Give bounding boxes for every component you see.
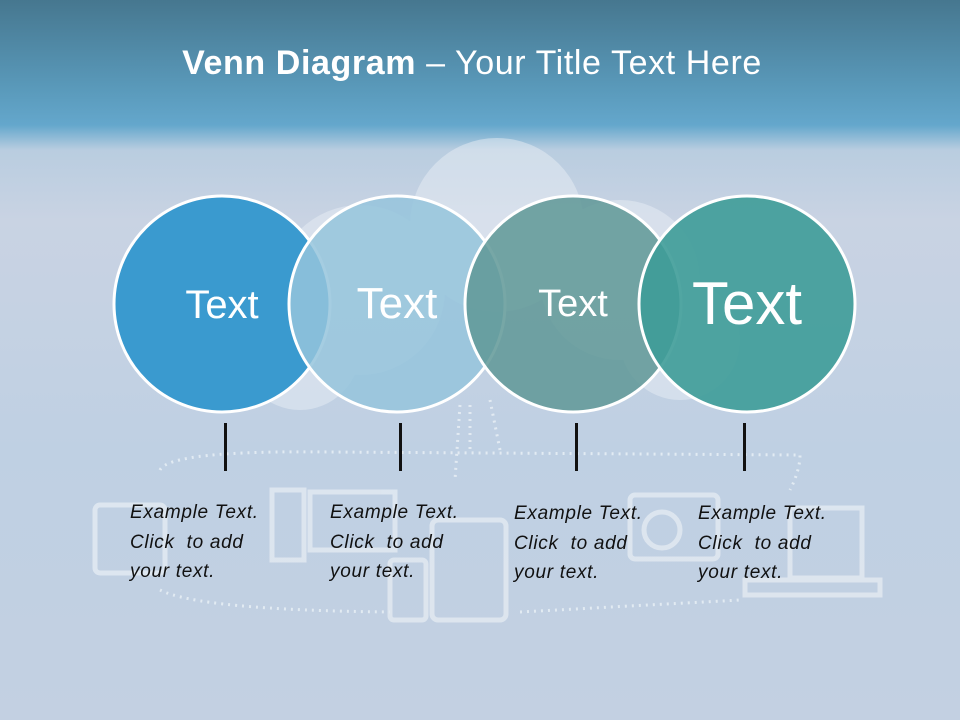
circle 3 [465,196,681,412]
text block 2: Click to add [330,532,444,552]
text block 3: Example Text. [514,503,643,524]
circle 2: Text [357,279,437,328]
circle 2 [289,196,505,412]
text block 2: Example Text. [330,502,459,523]
text block 1: your text. [130,561,215,582]
text block 1: Click to add [130,532,244,552]
text block 4 [696,503,827,583]
text block 1: Example Text. [130,502,259,523]
text block 4: Example Text. [698,503,827,524]
text block 3: your text. [514,562,599,583]
circle 1: Text [185,283,259,327]
circle 3: Text [538,283,608,325]
text block 4: Click to add [698,532,812,554]
title: Venn Diagram – Your Title Text Here [182,44,762,82]
text block 2: your text. [330,561,415,582]
circle 4: Text [692,270,802,337]
text block 2 [328,502,459,582]
connector lines [224,423,746,471]
text block 3 [512,503,643,583]
text block 4: your text. [698,562,783,583]
circle 4 [639,196,855,412]
text block 1 [128,502,259,582]
circle 1 [114,196,330,412]
text block 3: Click to add [514,532,628,554]
